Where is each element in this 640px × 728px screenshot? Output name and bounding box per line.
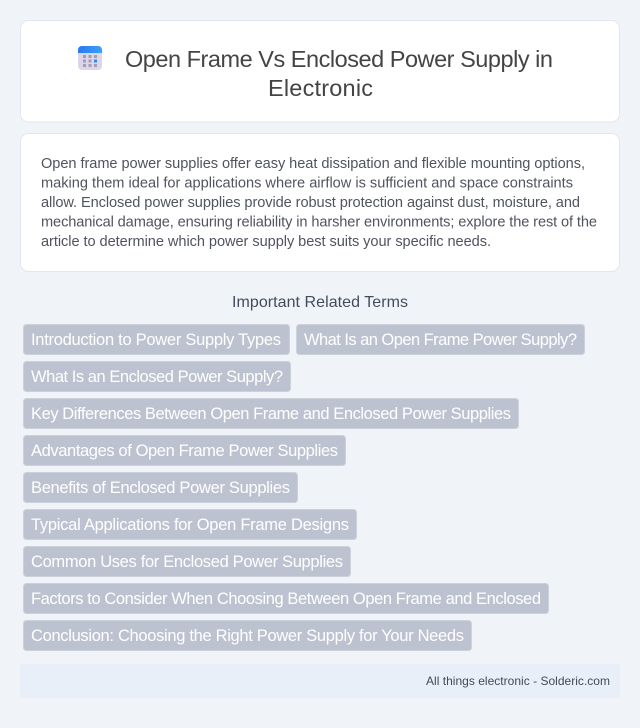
text block: introduction: mechanical damage, ensuring reliability in harsher environments; explore the rest of the	[41, 214, 597, 230]
heading: important related terms: Important Related Terms	[232, 294, 408, 311]
chip: enclosed definition	[24, 362, 290, 392]
title: Electronic	[268, 75, 373, 101]
chip: key differences	[24, 398, 518, 428]
chip: introduction: Introduction to Power Supply Types	[31, 331, 281, 349]
chip: open frame advantages	[24, 436, 346, 466]
chip: open frame definition	[296, 324, 584, 354]
title	[125, 46, 553, 101]
chip: introduction	[24, 324, 290, 354]
chip: conclusion: Conclusion: Choosing the Right Power Supply for Your Needs	[31, 627, 464, 645]
panel: title card	[20, 20, 620, 122]
icon: calendar	[78, 46, 102, 70]
chip: enclosed definition: What Is an Enclosed Power Supply?	[31, 368, 283, 386]
panel: intro text	[20, 134, 620, 272]
chip: open frame definition: What Is an Open Frame Power Supply?	[304, 331, 577, 349]
footer	[20, 664, 620, 698]
chip: choosing factors	[24, 584, 548, 614]
text block: introduction	[41, 156, 597, 250]
chip: enclosed uses	[24, 546, 350, 576]
text block: introduction: allow. Enclosed power supplies provide robust protection against dust, moisture, and	[41, 195, 580, 211]
chip: enclosed uses: Common Uses for Enclosed Power Supplies	[31, 553, 343, 571]
chip: conclusion	[24, 620, 472, 650]
text block: introduction: making them ideal for applications where airflow is sufficient and space constraints	[41, 176, 573, 192]
title: Open Frame Vs Enclosed Power Supply in	[125, 46, 553, 72]
chip: enclosed benefits: Benefits of Enclosed Power Supplies	[31, 479, 290, 497]
text block: introduction: article to determine which power supply best suits your specific needs.	[41, 234, 491, 250]
text block: introduction: Open frame power supplies offer easy heat dissipation and flexible mounting options,	[41, 156, 585, 172]
chips: related terms	[24, 324, 584, 650]
footer: All things electronic - Solderic.com	[426, 674, 610, 688]
chip: open frame applications	[24, 510, 356, 540]
chip: enclosed benefits	[24, 472, 298, 502]
chip: choosing factors: Factors to Consider When Choosing Between Open Frame and Enclosed	[31, 590, 541, 608]
chip: open frame applications: Typical Applications for Open Frame Designs	[31, 516, 349, 534]
chip: key differences: Key Differences Between Open Frame and Enclosed Power Supplies	[31, 405, 511, 423]
chip: open frame advantages: Advantages of Open Frame Power Supplies	[31, 442, 338, 460]
